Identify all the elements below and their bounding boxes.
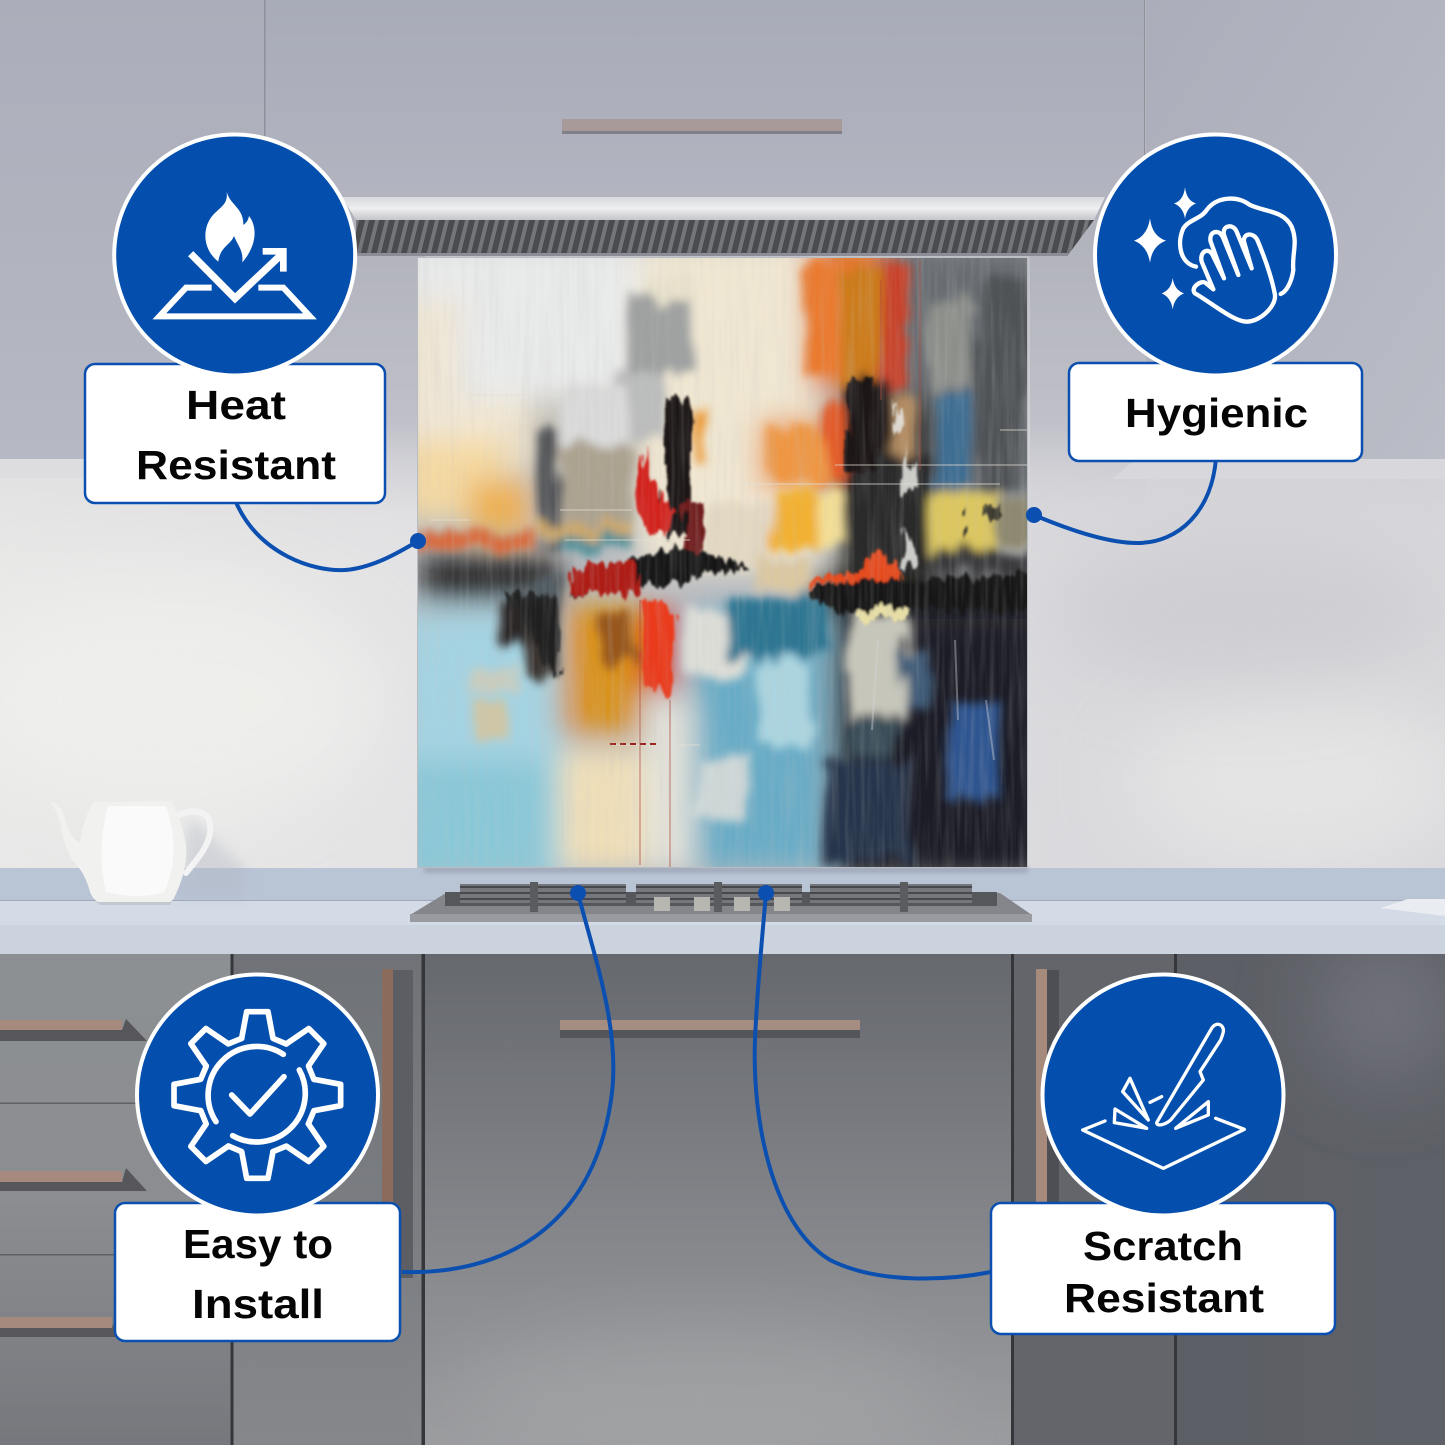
range hood [342, 197, 1105, 256]
callout: hygienic [1069, 134, 1362, 461]
heading: Easy to [183, 1221, 333, 1267]
badge circle [1095, 134, 1336, 376]
label box [991, 1203, 1335, 1334]
connector: heat resistant [235, 500, 426, 570]
icon: hand wiping with sparkles [1134, 187, 1295, 322]
cooktop [410, 882, 1032, 922]
label box [85, 364, 385, 503]
lower cabinets [0, 940, 1445, 1445]
callout: scratch resistant [991, 974, 1335, 1334]
icon: gear with check mark [174, 1012, 341, 1178]
heading: Scratch [1083, 1223, 1243, 1269]
callout: heat resistant [85, 134, 385, 503]
heading: Resistant [136, 442, 336, 488]
connector: scratch resistant [755, 885, 991, 1279]
badge circle [1042, 974, 1284, 1216]
heading: Resistant [1064, 1275, 1264, 1321]
heading: Heat [186, 382, 286, 428]
badge circle [114, 134, 355, 376]
paint: dark accents and shards [500, 380, 1027, 695]
label box [1069, 363, 1362, 461]
heading: Install [192, 1281, 324, 1327]
heading: Hygienic [1125, 390, 1308, 436]
paint: blended brush fields [420, 262, 1030, 862]
paint: soft colour fields [418, 258, 1027, 867]
kitchen wall [0, 190, 1445, 880]
countertop [0, 868, 1445, 954]
upper cabinets [0, 0, 1445, 517]
badge circle [137, 974, 378, 1216]
icon: knife scratching a surface [1083, 1024, 1244, 1168]
teapot [50, 801, 245, 905]
callout: easy to install [115, 974, 400, 1341]
cabinet handles [0, 969, 1059, 1337]
connector: hygienic [1026, 458, 1216, 543]
painted splashback panel [400, 240, 1050, 880]
connector: easy to install [402, 885, 613, 1272]
label box [115, 1203, 400, 1341]
upper handle [562, 119, 842, 134]
paint: fine scratch lines [430, 260, 1027, 867]
icon: flame on surface with arrow [159, 192, 310, 316]
